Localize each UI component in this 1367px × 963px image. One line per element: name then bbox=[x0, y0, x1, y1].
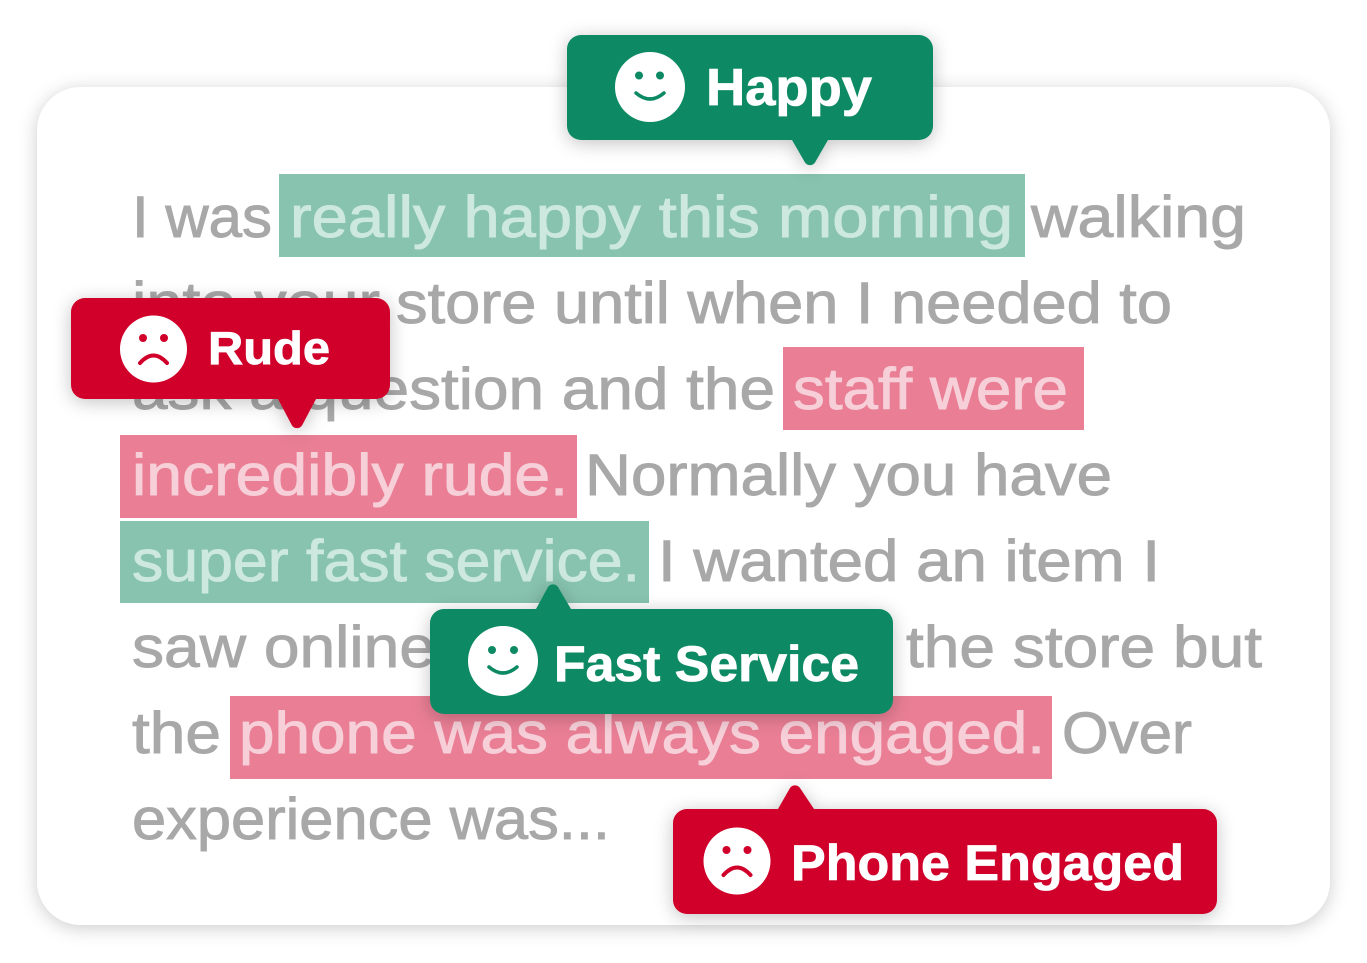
highlight: really happy this morning bbox=[279, 174, 1025, 257]
label: Happy: Happy bbox=[706, 59, 872, 117]
highlight: incredibly rude: incredibly rude. bbox=[132, 443, 568, 508]
plain review text: Normally you have bbox=[585, 443, 1112, 508]
highlight: phone was always engaged: phone was always engaged. bbox=[239, 701, 1045, 766]
plain review text: I was bbox=[132, 185, 272, 250]
plain review text bbox=[132, 185, 1262, 852]
label: Phone Engaged bbox=[673, 785, 1217, 914]
icon: happy face bbox=[615, 52, 685, 122]
plain review text: ask a question and the bbox=[132, 357, 775, 422]
label: Happy bbox=[567, 35, 933, 165]
label: Fast Service bbox=[430, 584, 893, 714]
highlight: really happy this morning: really happy this morning bbox=[290, 185, 1013, 250]
icon: sad face bbox=[704, 828, 770, 894]
highlight: super fast service: super fast service. bbox=[132, 529, 640, 594]
plain review text: experience was... bbox=[132, 787, 610, 852]
plain review text: Over bbox=[1062, 701, 1192, 766]
label: Fast Service: Fast Service bbox=[554, 636, 859, 692]
plain review text: walking bbox=[1030, 185, 1246, 250]
label: Rude: Rude bbox=[208, 322, 330, 374]
icon: sad face bbox=[120, 316, 187, 382]
plain review text: into your bbox=[132, 271, 380, 336]
plain review text: saw online bbox=[132, 615, 435, 680]
highlight: phone was always engaged bbox=[230, 696, 1052, 779]
label: Rude bbox=[71, 298, 390, 428]
highlight: staff were bbox=[783, 347, 1084, 430]
icon: happy face bbox=[468, 626, 538, 696]
highlight: staff were: staff were bbox=[793, 357, 1068, 422]
review text with highlights bbox=[120, 174, 1262, 852]
label: Phone Engaged: Phone Engaged bbox=[791, 835, 1184, 891]
plain review text: store until when I needed to bbox=[396, 271, 1172, 336]
plain review text: I wanted an item I bbox=[658, 529, 1160, 594]
plain review text: the store but bbox=[906, 615, 1262, 680]
plain review text: the bbox=[132, 701, 221, 766]
highlight: incredibly rude bbox=[120, 435, 577, 518]
